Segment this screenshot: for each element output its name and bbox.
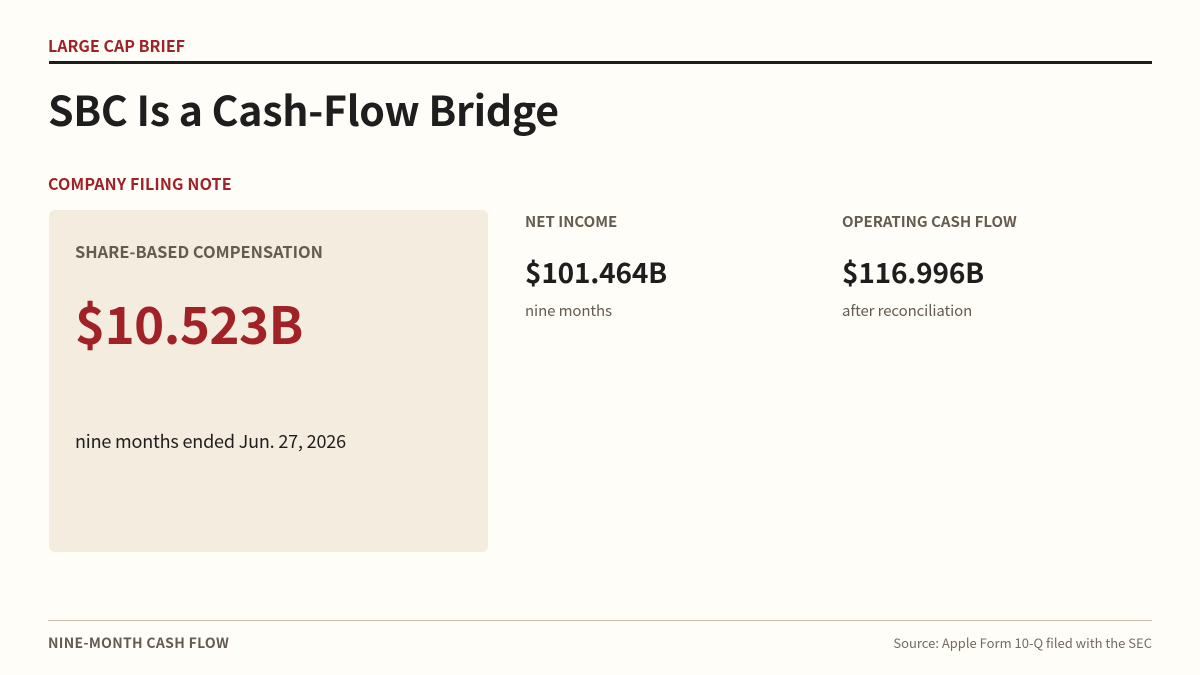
metric note: nine months [525,300,612,321]
header rule [49,61,1152,64]
footer label: NINE-MONTH CASH FLOW [48,633,229,653]
panel note: nine months ended Jun. 27, 2026 [75,428,346,454]
metric value: $101.464B [525,252,667,292]
title: SBC Is a Cash-Flow Bridge [48,78,559,138]
footer rule [48,620,1152,621]
section label: company filing note: COMPANY FILING NOTE [48,171,232,195]
kicker: large cap brief: LARGE CAP BRIEF [48,33,185,57]
panel label: SHARE-BASED COMPENSATION [75,239,323,263]
metric: operating cash flow [842,211,1017,321]
source note: Source: Apple Form 10-Q filed with the SEC [893,633,1152,652]
metric label: OPERATING CASH FLOW [842,211,1017,232]
metric: net income [525,211,667,321]
metric note: after reconciliation [842,300,972,321]
metric label: NET INCOME [525,211,617,232]
panel value: $10.523B [75,285,303,359]
panel: share-based compensation [49,210,488,552]
metric value: $116.996B [842,252,984,292]
